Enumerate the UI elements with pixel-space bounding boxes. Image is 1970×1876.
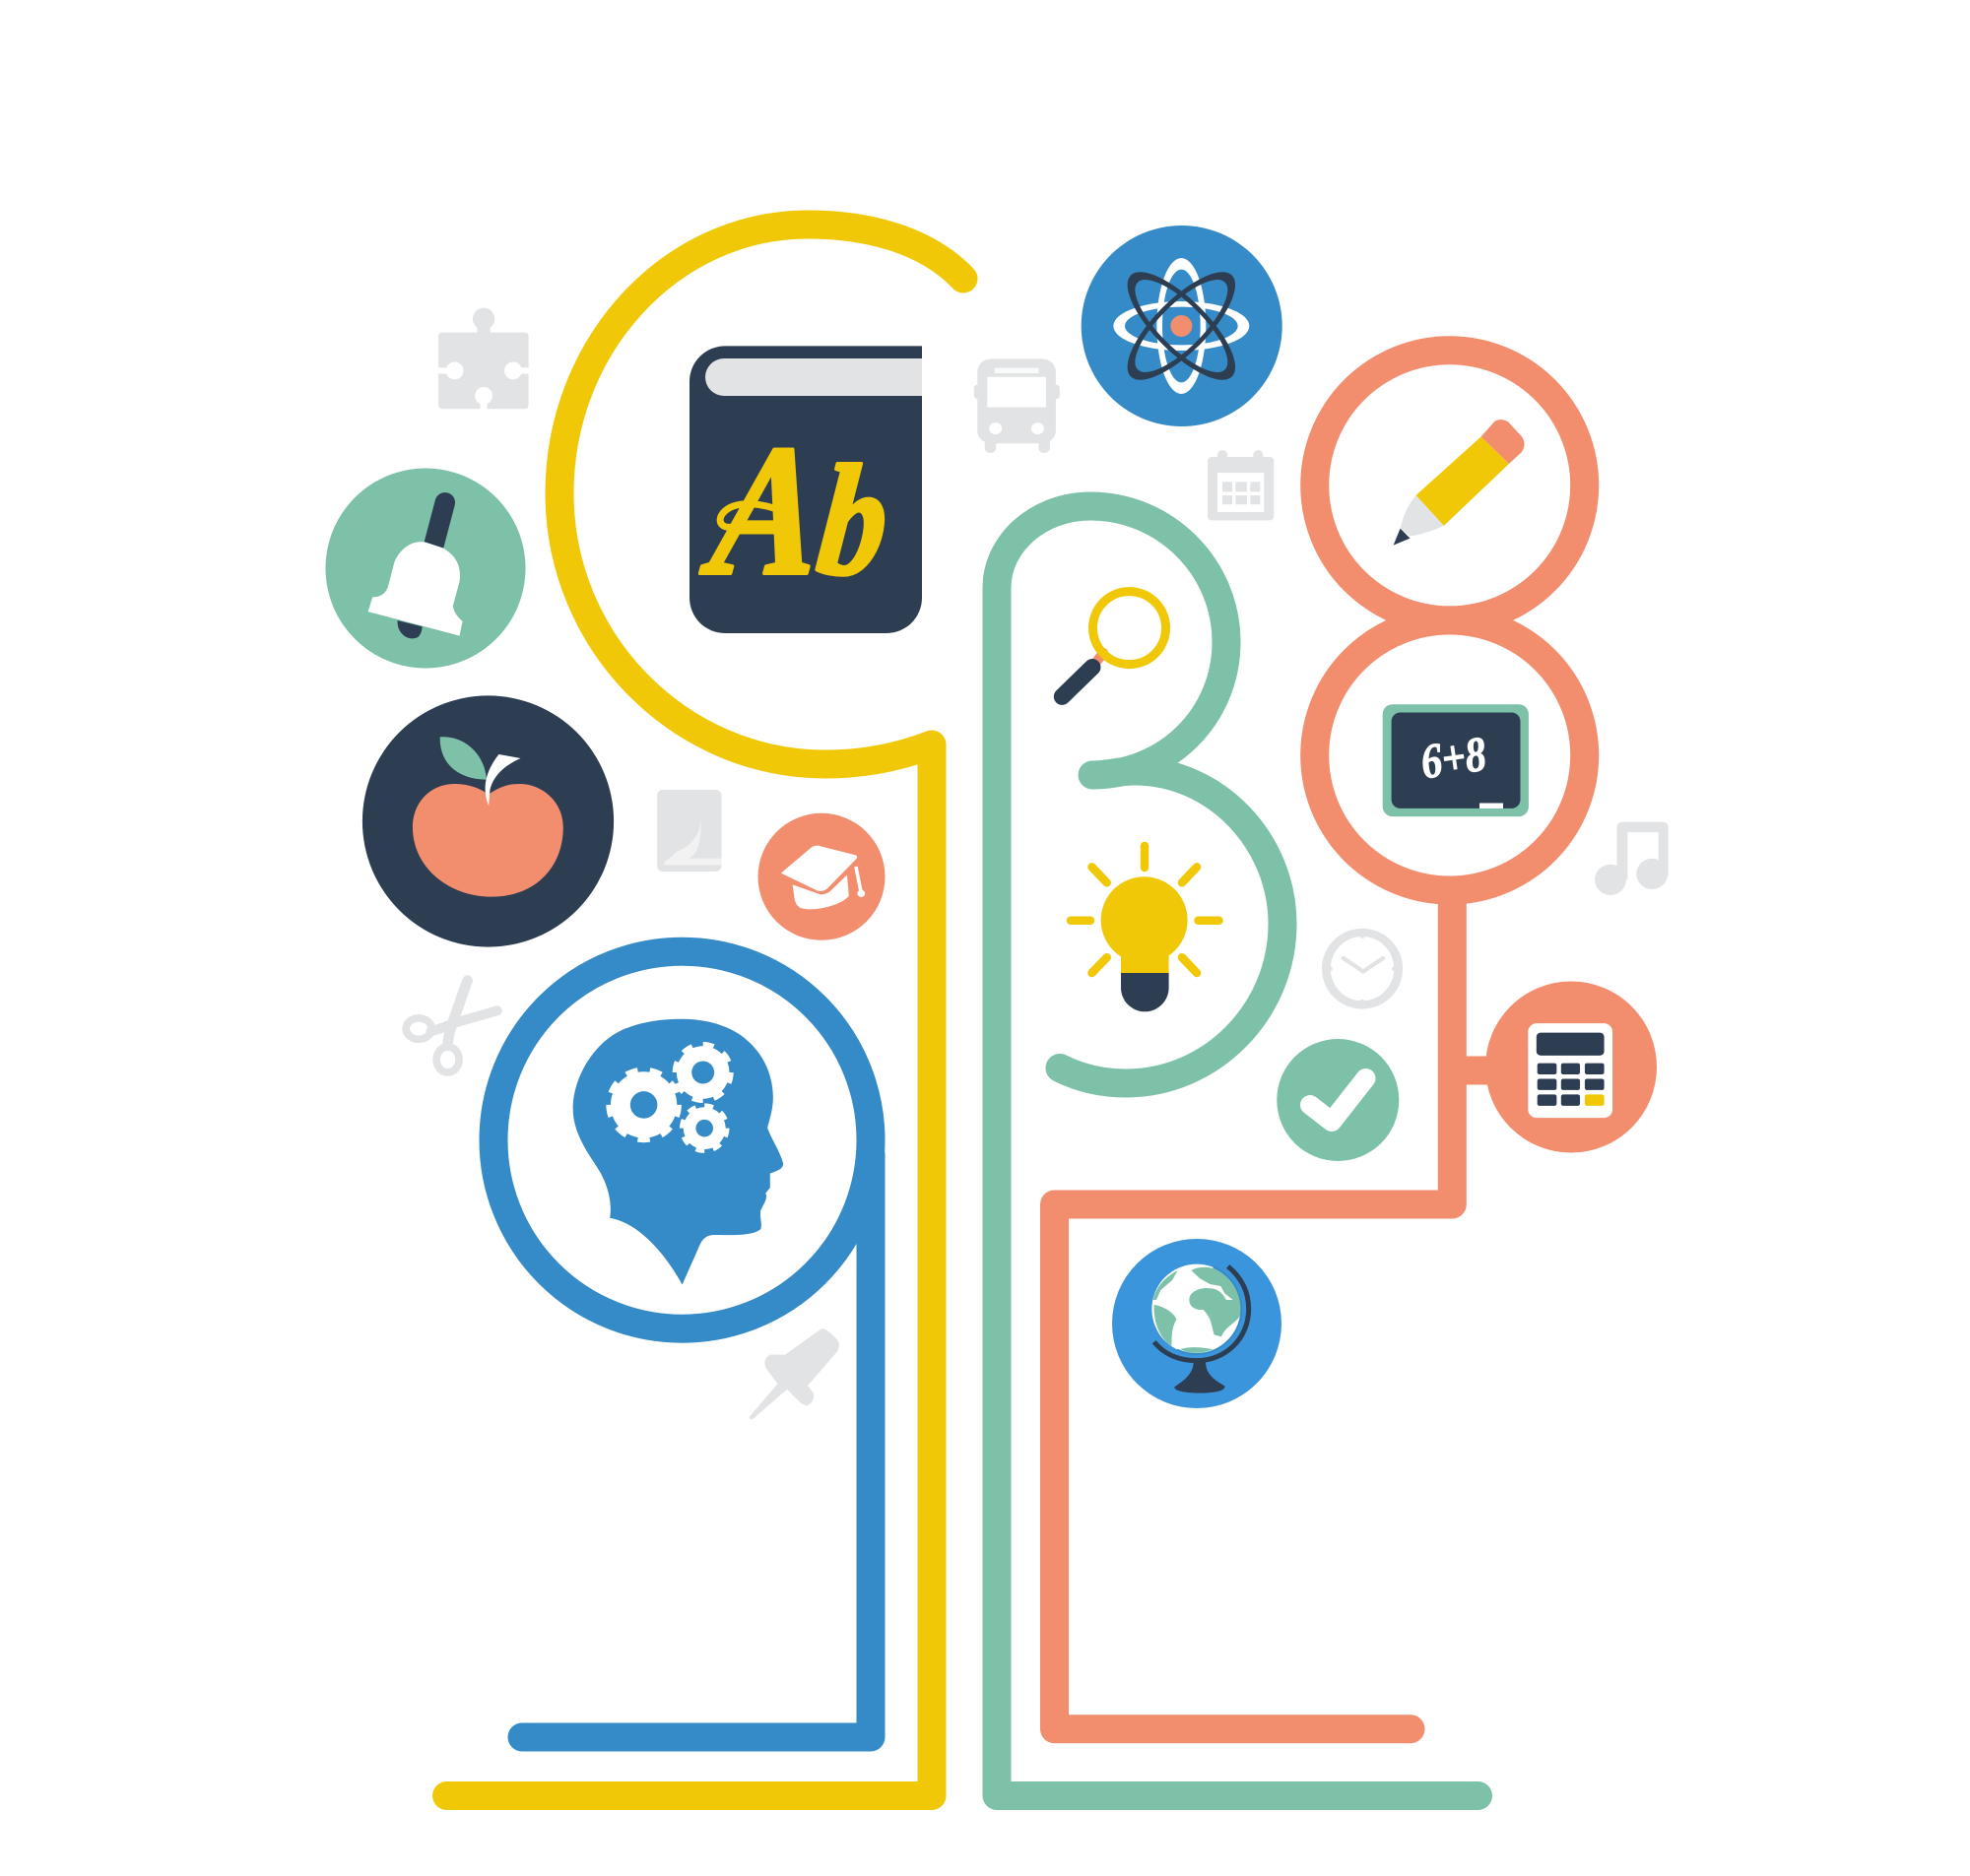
icon: globe bbox=[1112, 1239, 1281, 1408]
icon: grey clock bbox=[1326, 933, 1399, 1005]
blue branch line and ring bbox=[493, 951, 871, 1737]
icon: grey scissors bbox=[406, 981, 497, 1072]
icon: light bulb bbox=[1071, 846, 1219, 1011]
icon: atom bbox=[1082, 226, 1282, 426]
icon: graduation cap bbox=[758, 813, 885, 940]
icon: head with gears bbox=[573, 1019, 783, 1284]
icon: grey book bbox=[657, 790, 721, 872]
icon: grey calendar bbox=[1208, 450, 1274, 520]
icon: check mark bbox=[1277, 1039, 1399, 1161]
icon: Ab book bbox=[690, 346, 922, 633]
icon: grey music note bbox=[1595, 822, 1669, 895]
teal branch line bbox=[997, 506, 1478, 1796]
coral branch line and figure eight rings bbox=[1054, 351, 1585, 1729]
icon: pencil bbox=[1394, 420, 1525, 546]
icon: grey puzzle piece bbox=[436, 308, 531, 412]
icon: apple bbox=[362, 695, 614, 947]
icon: chalkboard: 6+8 bbox=[1417, 726, 1489, 789]
yellow branch line bbox=[447, 225, 963, 1796]
icon: grey bus bbox=[974, 358, 1060, 453]
icon: bell bbox=[325, 469, 526, 668]
icon: Ab book: Ab bbox=[695, 407, 899, 615]
icon: calculator bbox=[1485, 981, 1657, 1152]
icon: magnifying glass bbox=[1062, 592, 1166, 696]
icon: chalkboard bbox=[1383, 704, 1529, 816]
icon: grey push pin bbox=[750, 1328, 839, 1419]
